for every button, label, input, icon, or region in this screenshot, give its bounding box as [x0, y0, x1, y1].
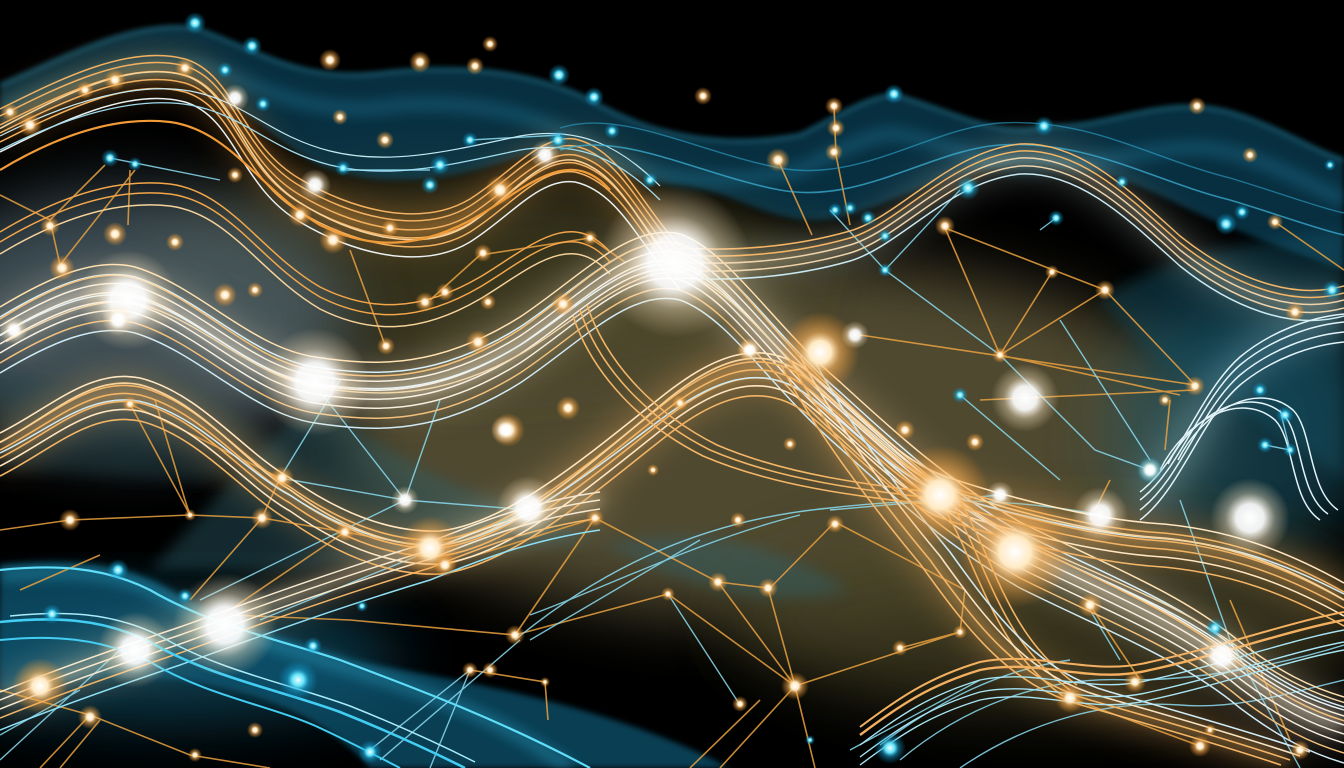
- fibre bundle: lower right: [860, 612, 1344, 765]
- light bursts: [0, 186, 1290, 714]
- fibre bundle: lower left: [0, 492, 600, 768]
- blue ribbon: right: [1100, 230, 1344, 480]
- haze: warm and teal glow: [0, 170, 1344, 720]
- fibre bundle: lower centre gold: [0, 305, 1344, 765]
- blue ribbon: lower left: [0, 375, 850, 768]
- blue ribbon: top: [0, 27, 1344, 270]
- fibre bundle: upper right: [680, 144, 1344, 320]
- nodes: small white sparks: [102, 84, 1162, 514]
- fibre bundle: right white curl: [1140, 314, 1344, 520]
- fibre bundle: centre white: [0, 232, 1344, 763]
- fibre bundle: upper left orange and blue: [0, 55, 1344, 327]
